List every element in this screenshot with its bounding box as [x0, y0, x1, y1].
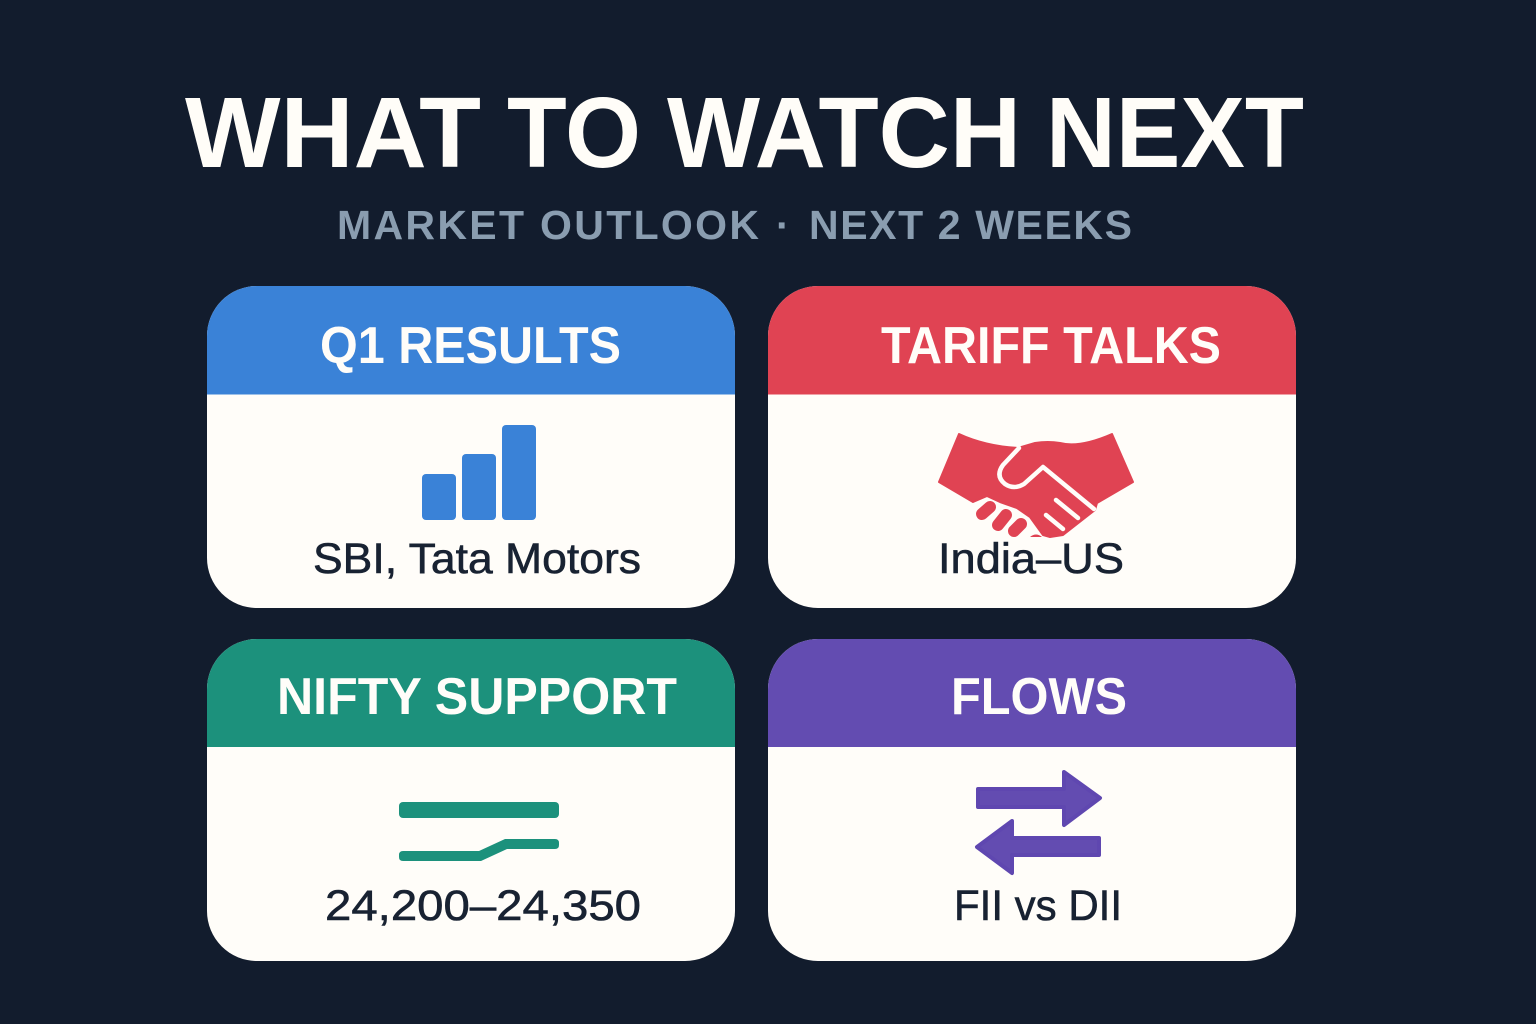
heading: Nifty support: NIFTY SUPPORT — [277, 668, 677, 726]
label: SBI, Tata Motors: SBI, Tata Motors — [313, 535, 641, 583]
panel: tariff talks — [768, 286, 1296, 608]
subtitle: NEXT 2 WEEKS — [809, 202, 1132, 248]
title: WATCH — [667, 77, 1021, 189]
panel: Nifty support — [207, 639, 735, 961]
label: FII vs DII: FII vs DII — [954, 882, 1122, 930]
icon: two-way arrows — [977, 772, 1100, 873]
title: TO — [507, 77, 641, 189]
title: WHAT — [185, 77, 481, 189]
subtitle — [337, 202, 1132, 248]
panel header: Nifty support — [207, 639, 735, 747]
panel: flows — [768, 639, 1296, 961]
heading: Q1 results: Q1 RESULTS — [320, 317, 621, 375]
icon: bar chart — [422, 425, 536, 520]
icon: support levels — [399, 802, 559, 861]
panel header: tariff talks — [768, 286, 1296, 394]
label: 24,200–24,350: 24,200–24,350 — [325, 882, 641, 930]
icon: handshake — [939, 434, 1133, 537]
panel: Q1 results — [207, 286, 735, 608]
subtitle: MARKET OUTLOOK — [337, 202, 759, 248]
title: NEXT — [1046, 77, 1304, 189]
title — [185, 77, 1304, 189]
panel header: Q1 results — [207, 286, 735, 394]
heading: tariff talks: TARIFF TALKS — [881, 317, 1221, 375]
panel header: flows — [768, 639, 1296, 747]
heading: flows: FLOWS — [951, 668, 1127, 726]
subtitle: · — [776, 202, 790, 248]
label: India–US: India–US — [938, 535, 1124, 583]
